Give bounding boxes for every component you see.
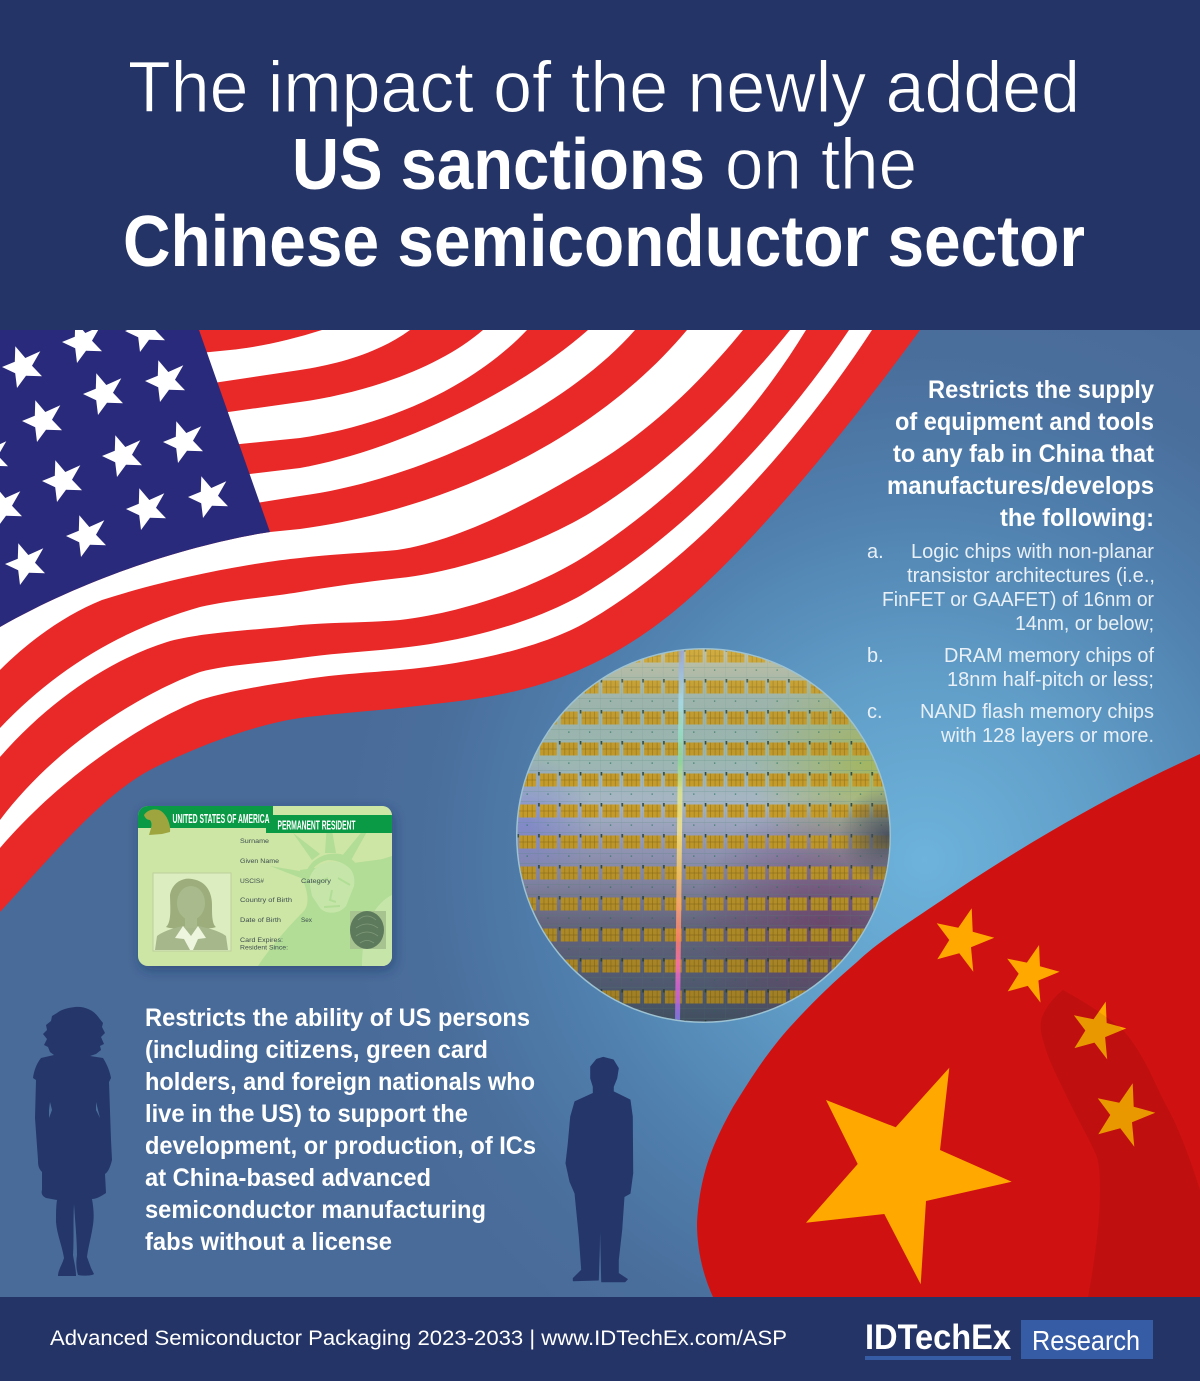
text block: US persons restriction <box>145 1004 536 1256</box>
list: restricted chips: 14nm, or below; <box>1015 613 1154 635</box>
card field labels: Category <box>301 878 332 885</box>
background panel <box>0 330 1200 1297</box>
text block: US persons restriction: (including citizens, green card <box>145 1036 488 1064</box>
heading: equipment restriction: the following: <box>1000 504 1154 532</box>
list: restricted chips: Logic chips with non-planar <box>911 541 1154 563</box>
title: US sanctions <box>292 125 705 205</box>
small gold stars <box>937 908 1155 1147</box>
statue of liberty watermark <box>258 833 392 966</box>
list: restricted chips <box>867 541 1155 747</box>
IDTechEx logo: Research <box>1032 1325 1140 1356</box>
flag fold shadow <box>1041 990 1200 1297</box>
silicon wafer <box>510 640 900 1030</box>
title: Chinese semiconductor sector <box>123 202 1085 282</box>
list: restricted chips: b. <box>867 645 884 667</box>
text block: US persons restriction: Restricts the ability of US persons <box>145 1004 530 1032</box>
heading: equipment restriction: Restricts the supply <box>928 376 1154 404</box>
card header bands <box>138 806 392 833</box>
card headings: PERMANENT RESIDENT <box>278 818 356 832</box>
footer band <box>0 1297 1200 1381</box>
card field labels: Given Name <box>240 858 279 865</box>
heading: equipment restriction: to any fab in China that <box>893 440 1155 468</box>
footer source text: Advanced Semiconductor Packaging 2023-2033 | www.IDTechEx.com/ASP <box>50 1327 787 1350</box>
card headings: UNITED STATES OF AMERICA <box>172 811 270 826</box>
list: restricted chips: 18nm half-pitch or less; <box>947 669 1154 691</box>
heading: equipment restriction: of equipment and tools <box>895 408 1154 436</box>
card field labels: Surname <box>240 838 269 845</box>
eagle emblem <box>144 809 170 835</box>
ID portrait <box>153 873 231 951</box>
text block: US persons restriction: fabs without a license <box>145 1228 392 1256</box>
text block: US persons restriction: semiconductor manufacturing <box>145 1196 486 1224</box>
list: restricted chips: c. <box>867 701 883 723</box>
card field labels <box>240 838 332 952</box>
card field labels: Resident Since: <box>240 944 288 952</box>
wafer rainbow reflection <box>675 648 684 1023</box>
list: restricted chips: transistor architectures (i.e., <box>907 565 1155 587</box>
list: restricted chips: a. <box>867 541 884 563</box>
text block: equipment restriction <box>867 376 1155 747</box>
text block: US persons restriction: holders, and foreign nationals who <box>145 1068 535 1096</box>
flag canton <box>0 330 270 627</box>
icon: man silhouette <box>566 1057 633 1282</box>
text block: US persons restriction: live in the US) to support the <box>145 1100 468 1128</box>
card headings <box>172 814 356 830</box>
fingerprint <box>350 911 386 949</box>
list: restricted chips: FinFET or GAAFET) of 16nm or <box>882 589 1154 611</box>
list: restricted chips: with 128 layers or more. <box>940 725 1154 747</box>
card field labels: USCIS# <box>240 878 264 885</box>
title: on the <box>725 125 917 205</box>
list: restricted chips: NAND flash memory chips <box>920 701 1154 723</box>
text block: US persons restriction: at China-based advanced <box>145 1164 431 1192</box>
icon: woman silhouette <box>33 1007 112 1276</box>
header band <box>0 0 1200 330</box>
US flag <box>0 310 920 912</box>
large gold star <box>806 1068 1012 1284</box>
card field labels: Date of Birth <box>240 917 281 924</box>
IDTechEx logo: IDTechEx <box>865 1318 1011 1357</box>
list: restricted chips: DRAM memory chips of <box>944 645 1154 667</box>
heading: equipment restriction: manufactures/develops <box>887 472 1154 500</box>
IDTechEx logo <box>865 1318 1153 1360</box>
Chinese flag <box>697 754 1200 1297</box>
card field labels: Sex <box>301 917 313 924</box>
card field labels: Country of Birth <box>240 897 292 904</box>
heading: equipment restriction <box>887 376 1155 532</box>
text block: US persons restriction: development, or production, of ICs <box>145 1132 536 1160</box>
title <box>123 48 1085 282</box>
flag stars <box>0 310 228 585</box>
green card <box>138 806 392 966</box>
card field labels: Card Expires: <box>240 937 283 944</box>
title: The impact of the newly added <box>128 48 1080 128</box>
